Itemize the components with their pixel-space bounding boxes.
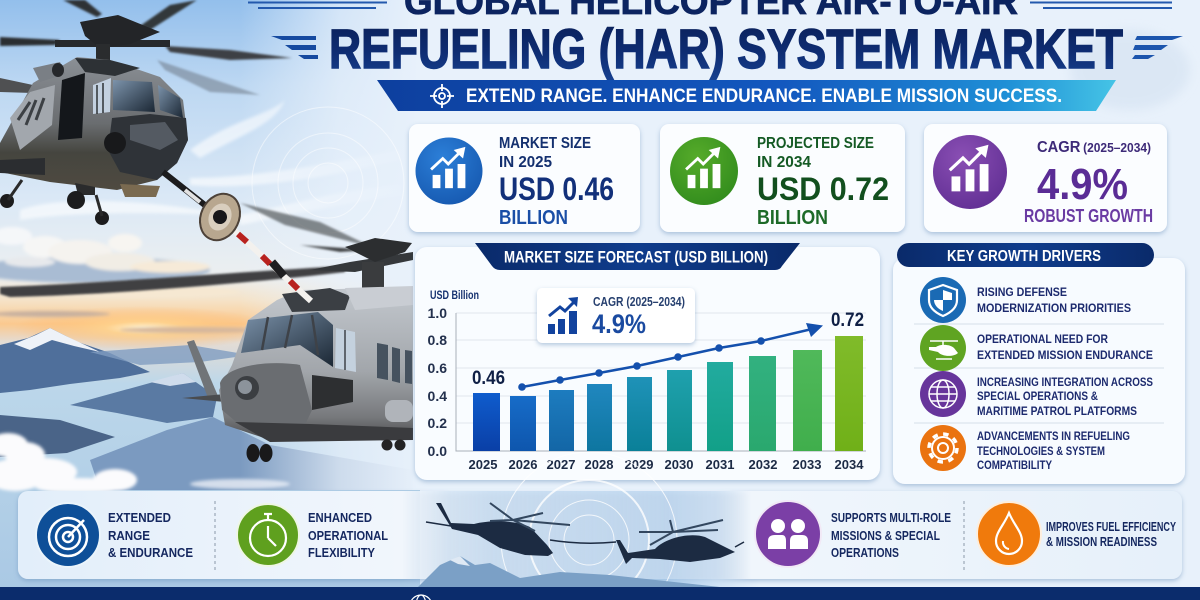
panel: projected size 2034: BILLION [757,207,828,229]
radar rings and mountains [418,452,720,600]
benefit: extended range [36,503,193,567]
bar chart: USD Billion [430,290,479,302]
driver: mission endurance: EXTENDED MISSION ENDURANCE [977,348,1153,362]
helicopter: receiver (lower) [0,203,413,462]
heading: key growth drivers [897,243,1154,267]
panel: projected size 2034 [660,124,905,232]
bar chart: 2030 [665,457,693,472]
radar rings [252,107,404,259]
driver: refueling technologies: COMPATIBILITY [977,458,1052,472]
icon: purple growth chart [933,135,1007,209]
benefit: multi-role missions: MISSIONS & SPECIAL [831,528,940,543]
heading: key growth drivers: KEY GROWTH DRIVERS [947,248,1101,265]
bar chart: 2028 [585,457,613,472]
benefit: multi-role missions: SUPPORTS MULTI-ROLE [831,510,951,525]
heading: chart title [475,243,800,270]
driver: platform integration: MARITIME PATROL PLATFORMS [977,404,1137,418]
driver: mission endurance [920,325,1153,371]
benefit: operational flexibility: FLEXIBILITY [308,545,375,560]
tagline ribbon [377,80,1116,111]
bar chart: 0.6 [428,360,447,376]
panel: CAGR: ROBUST GROWTH [1024,206,1153,226]
driver: defense modernization: RISING DEFENSE [977,285,1067,299]
bar chart: 2033 [793,457,821,472]
driver: refueling technologies [920,425,1130,472]
panel: market size forecast chart [415,243,880,480]
driver: refueling technologies: TECHNOLOGIES & SYSTEM [977,444,1105,458]
bar chart: 2032 [749,457,777,472]
panel: market size 2025: BILLION [499,207,568,229]
benefit: multi-role missions [755,501,951,567]
callout: CAGR in chart [537,288,695,343]
driver: platform integration: INCREASING INTEGRATION ACROSS [977,375,1153,389]
refueling boom and drogue [163,172,311,301]
bar chart: 0.4 [428,388,447,404]
panel: market size 2025: IN 2025 [499,154,552,171]
panel: projected size 2034: IN 2034 [757,154,811,171]
bar chart: 0.8 [428,332,447,348]
bar chart: 2034 [835,457,864,472]
driver: defense modernization [920,277,1131,323]
clouds: horizon bank [0,227,260,333]
footer bar [0,587,1200,600]
bar chart: 0.0 [428,443,447,459]
benefit: operational flexibility [237,504,388,566]
driver: platform integration: SPECIAL OPERATIONS & [977,389,1098,403]
driver: platform integration [920,371,1153,418]
benefit: fuel efficiency: & MISSION READINESS [1046,534,1157,549]
callout: CAGR in chart: CAGR (2025–2034) [593,295,685,309]
panel: bottom benefits strip [18,452,1182,600]
panel: market size 2025: MARKET SIZE [499,135,591,152]
helicopter: tanker (upper) [0,0,292,225]
benefit: extended range: EXTENDED [108,510,171,525]
bar chart: 2031 [706,457,734,472]
bar chart: 2026 [509,457,537,472]
panel: key growth drivers [893,243,1185,484]
bar chart: 0.46 [472,368,505,389]
driver: refueling technologies: ADVANCEMENTS IN REFUELING [977,429,1130,443]
clouds: lower left [0,433,290,494]
benefit: extended range: RANGE [108,528,150,543]
panel: CAGR [924,124,1167,232]
trend arrow [518,323,823,391]
helicopters refueling [426,503,744,564]
mountains [0,328,413,490]
bar chart: 2027 [547,457,575,472]
panel: market size 2025 [409,124,640,232]
tagline ribbon: EXTEND RANGE. ENHANCE ENDURANCE. ENABLE MISSION SUCCESS. [466,86,1062,107]
benefit: extended range: & ENDURANCE [108,545,193,560]
benefit: fuel efficiency [977,502,1176,566]
benefit: multi-role missions: OPERATIONS [831,545,899,560]
icon: globe [410,595,432,600]
callout: CAGR in chart: 4.9% [592,309,646,339]
panel: projected size 2034: PROJECTED SIZE [757,135,874,152]
bar chart: 0.2 [428,415,447,431]
bar chart: 1.0 [428,305,447,321]
panel: market size 2025: USD 0.46 [499,171,614,207]
icon: green growth chart [670,137,738,205]
panel: projected size 2034: USD 0.72 [757,171,889,207]
bar chart: 0.72 [831,310,864,331]
bar chart: 2029 [625,457,653,472]
panel: CAGR: 4.9% [1037,160,1128,209]
benefit: operational flexibility: OPERATIONAL [308,528,388,543]
benefit: operational flexibility: ENHANCED [308,510,372,525]
heading: chart title: MARKET SIZE FORECAST (USD BILLION) [504,248,768,266]
driver: defense modernization: MODERNIZATION PRIORITIES [977,301,1131,315]
bar chart: 2025 [469,457,497,472]
bar chart [428,290,866,472]
driver: mission endurance: OPERATIONAL NEED FOR [977,332,1108,346]
icon: blue growth chart [416,138,482,204]
panel: CAGR: CAGR(2025–2034) [1037,139,1151,156]
icon: crosshair target [430,84,454,108]
